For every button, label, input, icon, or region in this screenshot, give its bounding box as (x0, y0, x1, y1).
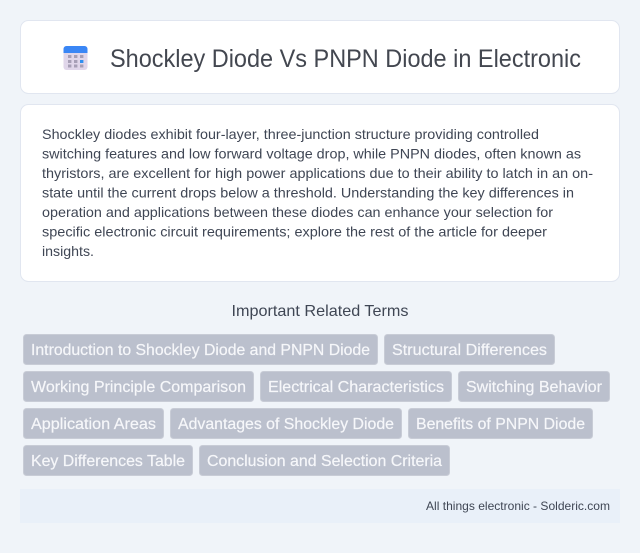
tag: conclusion: Conclusion and Selection Criteria (207, 453, 442, 470)
footer (20, 489, 620, 523)
tag: electrical characteristics (260, 372, 452, 402)
heading: related terms: Important Related Terms (232, 303, 408, 320)
tag: conclusion (200, 446, 450, 476)
footer: All things electronic - Solderic.com (426, 499, 610, 513)
tag: key differences: Key Differences Table (31, 453, 185, 470)
tag: key differences (24, 446, 192, 476)
tag: application areas: Application Areas (31, 416, 156, 433)
tag: introduction: Introduction to Shockley Diode and PNPN Diode (31, 342, 370, 359)
tag group: related terms (24, 334, 610, 476)
tag: advantages: Advantages of Shockley Diode (178, 416, 394, 433)
tag: benefits: Benefits of PNPN Diode (416, 416, 585, 433)
tag: structural differences: Structural Differences (392, 342, 547, 359)
tag: structural differences (384, 334, 554, 364)
tag: working principle (24, 372, 254, 402)
text block: description paragraph: state until the current drops below a threshold. Understanding the key differences in (42, 184, 574, 200)
tag: electrical characteristics: Electrical Characteristics (268, 379, 444, 396)
panel: description (20, 104, 620, 282)
tag: introduction (24, 334, 378, 364)
tag: benefits (408, 408, 592, 438)
text block: description paragraph: insights. (42, 243, 94, 259)
tag: switching behavior: Switching Behavior (466, 379, 603, 396)
title: Shockley Diode Vs PNPN Diode in Electronic (110, 45, 581, 73)
text block: description paragraph: thyristors, are excellent for high power applications due to their ability to latch in an on- (42, 165, 593, 181)
text block: description paragraph: Shockley diodes exhibit four-layer, three-junction structure providing controlled (42, 126, 539, 142)
text block: description paragraph: specific electronic circuit requirements; explore the rest of the article for deeper (42, 224, 547, 240)
text block: description paragraph: operation and applications between these diodes can enhance your selection for (42, 204, 553, 220)
tag: working principle: Working Principle Comparison (31, 379, 246, 396)
text block: description paragraph (42, 126, 593, 259)
icon: calendar (64, 46, 88, 70)
tag: switching behavior (458, 372, 610, 402)
panel: header card (20, 20, 620, 94)
text block: description paragraph: switching features and low forward voltage drop, while PNPN diodes, often known as (42, 146, 581, 162)
tag: advantages (170, 408, 402, 438)
tag: application areas (24, 408, 164, 438)
